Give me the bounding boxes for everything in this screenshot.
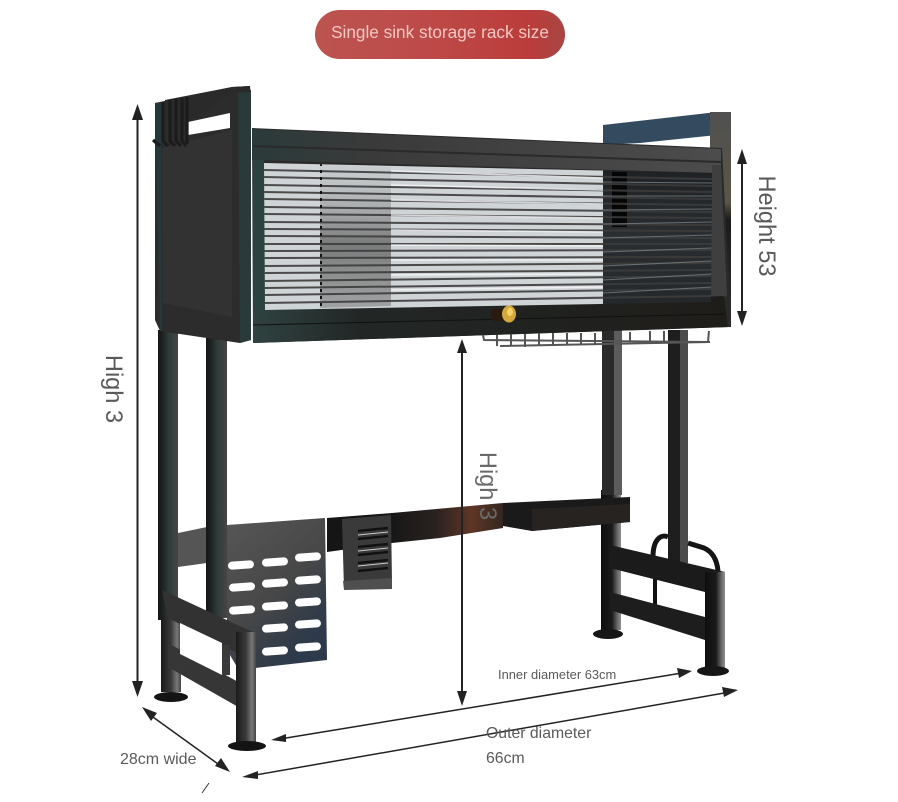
utensil basket	[342, 515, 392, 590]
arrow: outer diameter	[242, 687, 738, 779]
arrow: total height	[132, 104, 143, 697]
left side frame and handle	[155, 86, 251, 343]
cabinet frame	[252, 128, 731, 343]
right foot frame	[593, 490, 729, 676]
label: outer diameter	[486, 725, 591, 767]
label: cabinet height: Height 53	[753, 176, 779, 276]
infographic: rack dimensions diagram	[101, 10, 776, 794]
ribbed glass door	[264, 160, 713, 315]
arrow: inner diameter	[271, 668, 692, 742]
label: inner clearance height: High 3	[474, 452, 500, 520]
label: total height: High 3	[100, 355, 126, 423]
right front post	[602, 330, 622, 495]
label: outer diameter: Outer diameter	[486, 725, 591, 742]
long cross rail	[327, 497, 630, 552]
rack illustration	[153, 86, 731, 751]
stray tick mark	[202, 783, 209, 793]
label: width: 28cm wide	[120, 751, 197, 768]
right handle	[603, 112, 731, 327]
title pill: Single sink storage rack size	[331, 22, 549, 42]
rear right post	[668, 330, 688, 563]
label: inner diameter: Inner diameter 63cm	[498, 667, 616, 682]
left front post	[206, 338, 227, 618]
arrow: width	[142, 707, 230, 772]
arrow: inner clearance height	[457, 339, 467, 706]
title pill	[315, 10, 565, 59]
label: outer diameter: 66cm	[486, 750, 525, 767]
back panel with slots	[178, 518, 327, 672]
knife hooks	[153, 97, 187, 146]
left rear leg	[154, 330, 188, 702]
brass knob	[491, 306, 516, 322]
left foot frame	[162, 590, 266, 751]
arrow: cabinet height	[737, 149, 747, 326]
cup wire rack	[483, 331, 710, 347]
